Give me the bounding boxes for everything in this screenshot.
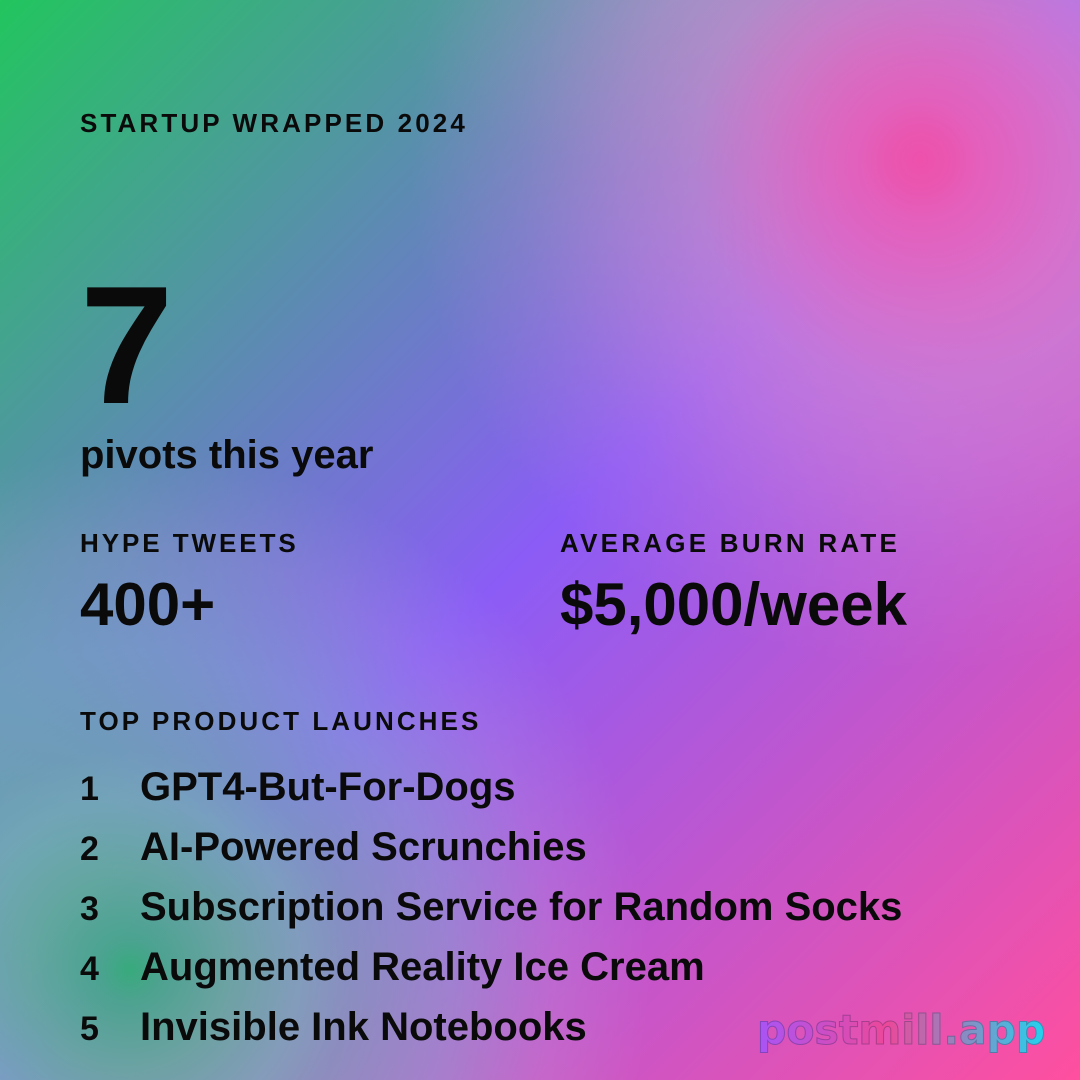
stat: average burn rate [560,528,907,638]
list item 4: 4 [80,950,99,988]
watermark: postmill.app [757,1006,1045,1054]
list item 5: Invisible Ink Notebooks [140,1005,587,1049]
hero caption: pivots this year [80,433,373,477]
list heading: TOP PRODUCT LAUNCHES [80,706,481,736]
hero number: 7 [80,251,173,439]
stat value: 400+ [80,571,215,638]
list item 3: 3 [80,890,99,928]
list item 2: 2 [80,830,99,868]
list item 4: Augmented Reality Ice Cream [140,945,705,989]
ranked list of product launches [80,765,902,1049]
eyebrow heading: STARTUP WRAPPED 2024 [80,108,468,138]
list item 1: GPT4-But-For-Dogs [140,765,516,809]
stat label: HYPE TWEETS [80,528,299,558]
stat label: AVERAGE BURN RATE [560,528,900,558]
stat: hype tweets [80,528,299,638]
list item 1: 1 [80,770,99,808]
list item 3: Subscription Service for Random Socks [140,885,902,929]
stat value: $5,000/week [560,571,907,638]
list item 5: 5 [80,1010,99,1048]
list item 2: AI-Powered Scrunchies [140,825,587,869]
